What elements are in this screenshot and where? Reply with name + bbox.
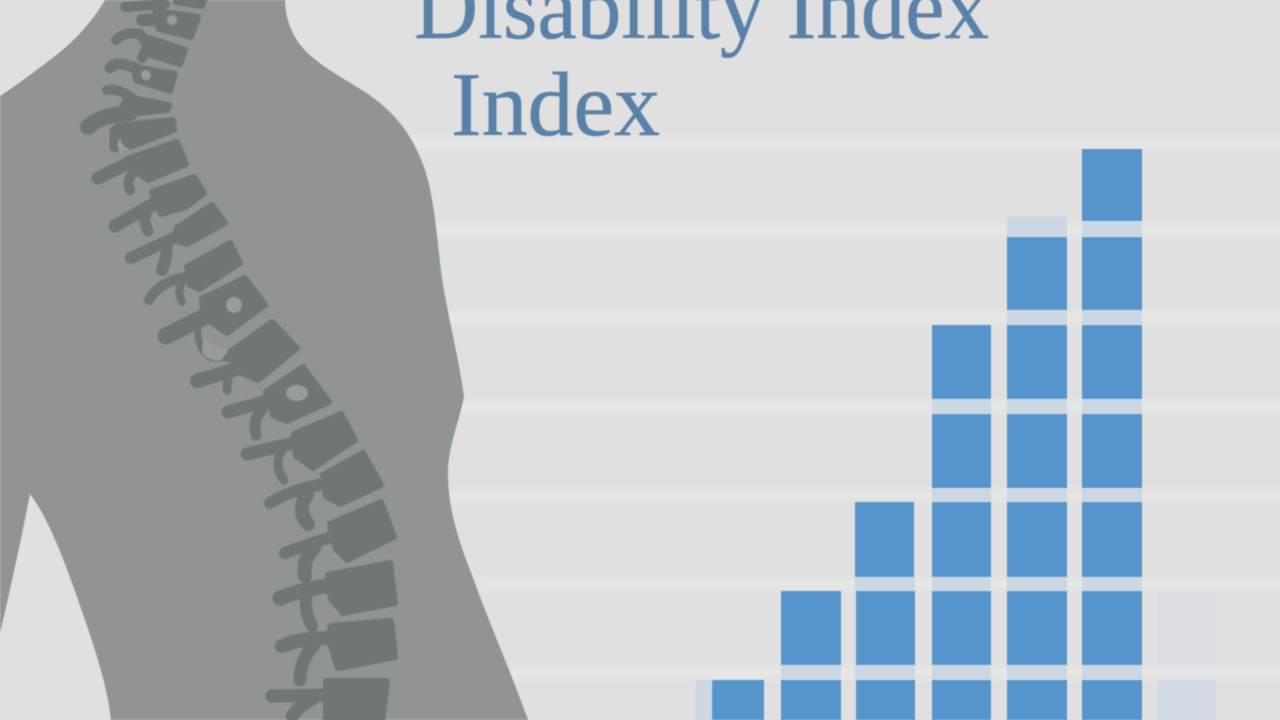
bar 2 — [781, 591, 841, 720]
vertebra 1 — [176, 0, 205, 6]
bar 7 faded — [1158, 591, 1216, 720]
vertebra 17 — [328, 563, 395, 613]
bar chart — [696, 149, 1216, 720]
bar 1 — [712, 680, 764, 720]
vertebra 2 — [155, 11, 198, 37]
vertebra 3 — [147, 38, 185, 64]
vertebra foramina highlights — [118, 15, 308, 401]
title line: Index: Index — [451, 54, 660, 155]
vertebra 19 — [326, 681, 387, 720]
title — [414, 0, 989, 155]
vertebra 4 — [134, 67, 175, 91]
bar 6 — [1082, 149, 1142, 720]
vertebra 7 — [127, 142, 186, 180]
spine — [88, 0, 395, 720]
faded bar separators — [696, 217, 1142, 720]
vertebra 5 — [118, 97, 169, 115]
human torso silhouette — [0, 0, 528, 720]
vertebra 8 — [152, 177, 204, 214]
vertebra 13 — [266, 367, 329, 421]
spinal processes — [88, 4, 338, 716]
bar 5 — [1007, 237, 1067, 720]
bar 4 — [932, 325, 991, 720]
vertebra 18 — [328, 621, 395, 668]
vertebra 12 — [230, 322, 297, 380]
vertebra 10 — [187, 243, 240, 289]
vertebra 9 — [173, 205, 225, 244]
vertebra 14 — [294, 414, 355, 468]
vertebra 15 — [323, 453, 381, 504]
vertebra 11 — [202, 278, 265, 333]
vertebra 16 — [330, 502, 394, 560]
bar 3 — [855, 502, 915, 720]
vertebra 6 — [114, 120, 174, 147]
